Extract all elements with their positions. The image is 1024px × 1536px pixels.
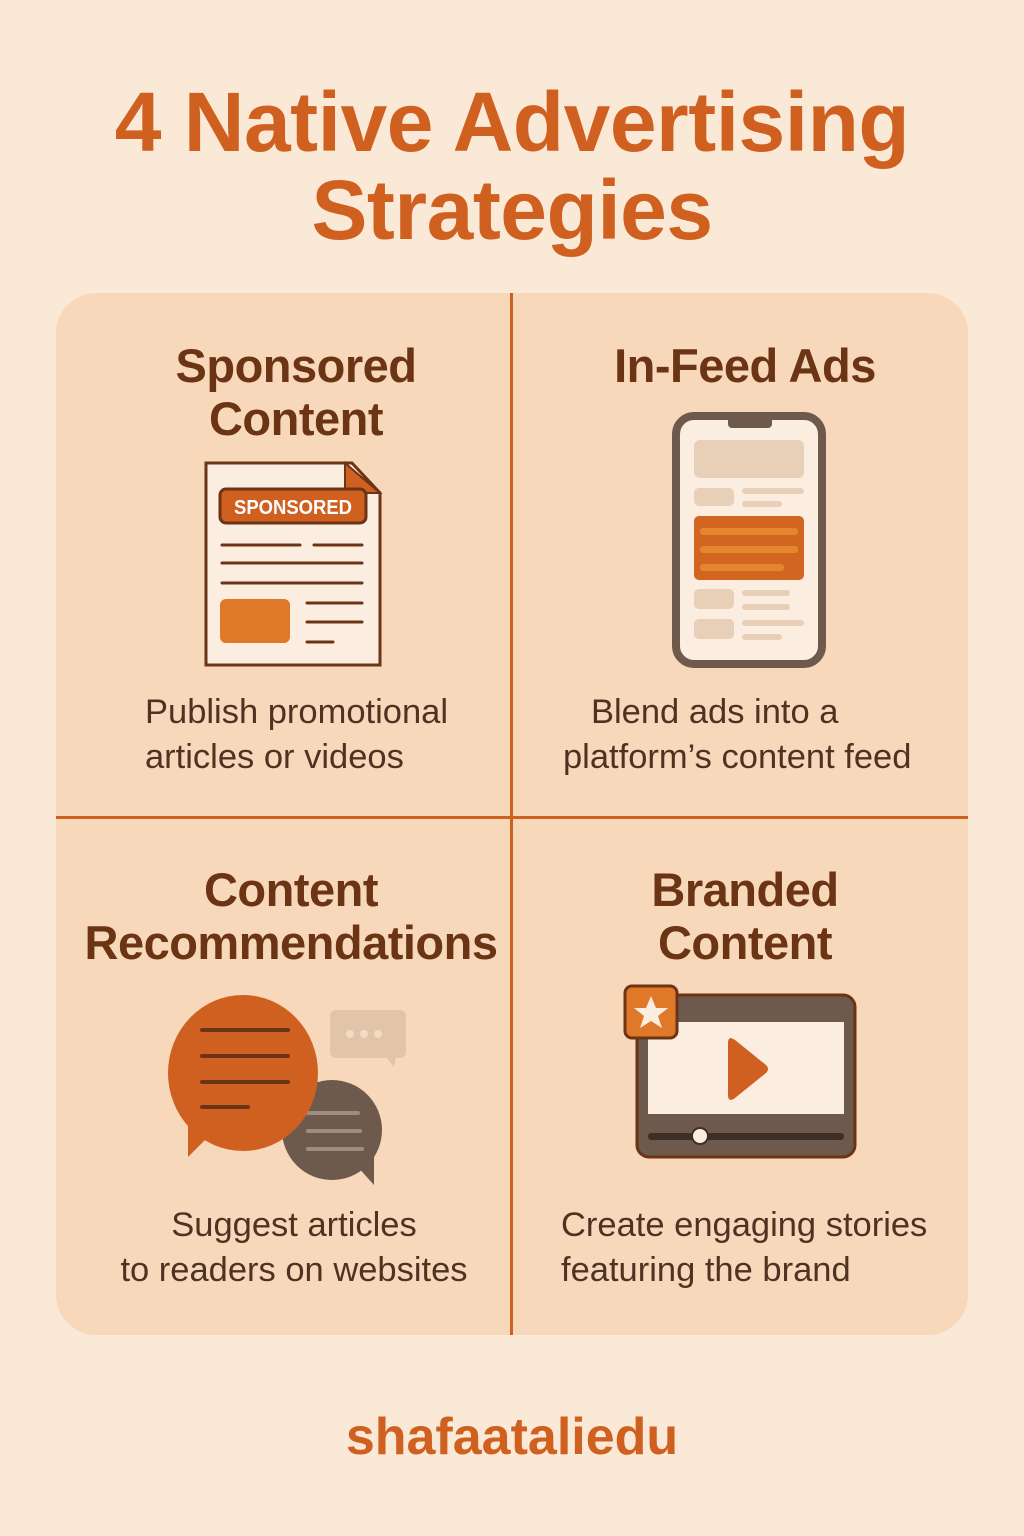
description: in-feed ads	[563, 693, 911, 776]
title: Strategies	[311, 163, 713, 257]
description: sponsored content: articles or videos	[145, 738, 404, 776]
description: branded content	[561, 1206, 927, 1289]
panel grid	[56, 293, 968, 1335]
description: content recommendations: to readers on websites	[120, 1251, 468, 1289]
heading: content recommendations	[84, 863, 497, 969]
heading: branded content	[651, 863, 839, 969]
title	[115, 75, 909, 257]
panel: branded content	[561, 863, 927, 1289]
icon: sponsored document: SPONSORED	[234, 497, 352, 519]
panel: in-feed ads	[563, 339, 911, 776]
icon: chat bubbles	[168, 995, 406, 1185]
panel: content recommendations	[84, 863, 497, 1289]
description: branded content: Create engaging stories	[561, 1206, 927, 1244]
description: in-feed ads: Blend ads into a	[591, 693, 838, 731]
description: branded content: featuring the brand	[561, 1251, 851, 1289]
title: 4 Native Advertising	[115, 75, 909, 169]
heading: content recommendations: Recommendations	[84, 916, 497, 969]
heading: sponsored content: Sponsored	[176, 339, 416, 392]
heading: branded content: Branded	[651, 863, 839, 916]
heading: sponsored content	[176, 339, 416, 445]
heading: in-feed ads: In-Feed Ads	[614, 339, 876, 392]
description: content recommendations	[120, 1206, 468, 1289]
icon: sponsored document	[204, 461, 383, 666]
description: content recommendations: Suggest articles	[171, 1206, 417, 1244]
icon: video player	[624, 984, 856, 1158]
description: sponsored content	[145, 693, 448, 776]
description: sponsored content: Publish promotional	[145, 693, 448, 731]
description: in-feed ads: platform’s content feed	[563, 738, 911, 776]
heading: content recommendations: Content	[204, 863, 378, 916]
panel: sponsored content	[145, 339, 448, 776]
heading: sponsored content: Content	[209, 392, 383, 445]
heading: branded content: Content	[658, 916, 832, 969]
icon: phone feed	[672, 412, 826, 668]
footer brand: shafaataliedu	[346, 1408, 678, 1466]
